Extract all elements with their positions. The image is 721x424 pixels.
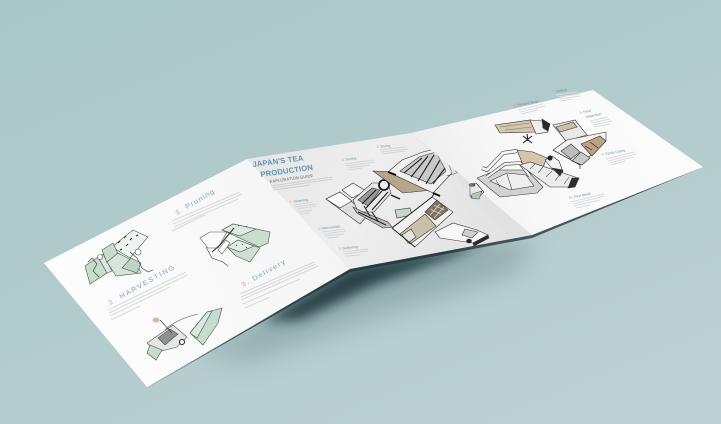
- heading: 3. Delivery: 3. Delivery: [240, 259, 288, 289]
- panel: middle page: [247, 128, 532, 269]
- subtitle: EXPLORATION GUIDE: [269, 173, 314, 184]
- fold shading: [411, 133, 532, 238]
- step labels: Inspection: [585, 112, 602, 119]
- step labels: 9. Finish Drying: [601, 148, 626, 157]
- step labels: 10. First Break: [568, 192, 592, 200]
- step labels: 6. Second Stage: [513, 99, 539, 108]
- title: JAPAN'S TEA: [252, 153, 305, 169]
- illustration: pruning hedges: [200, 224, 270, 266]
- step labels: [513, 88, 636, 208]
- machine: long upper machine: [495, 119, 550, 143]
- panel: right page: [411, 88, 703, 235]
- machine: upper sorting machine: [373, 128, 492, 196]
- step labels: 1. Steaming: [289, 198, 308, 204]
- step labels: 4. Sorting: [341, 156, 357, 162]
- heading: 1. Pruning: 1. Pruning: [174, 188, 217, 217]
- text block: pruning: [172, 192, 242, 231]
- step labels: [289, 144, 408, 256]
- step labels: 3. Delivering: [338, 245, 358, 251]
- illustration: delivery van: [435, 223, 489, 246]
- illustration: harvesting hedges: [85, 230, 153, 284]
- step labels: 2. Intermediate: [317, 224, 341, 231]
- machine: right compartments: [553, 120, 606, 169]
- title: PRODUCTION: [260, 163, 314, 179]
- illustration: worker with tea: [469, 183, 484, 199]
- title: [252, 153, 314, 184]
- text block: delivery: [240, 262, 318, 308]
- heading: 2. Harvesting: 2. HARVESTING: [107, 264, 177, 307]
- panel: left page: [44, 159, 350, 387]
- text block: intro: [271, 177, 333, 190]
- step labels: 8. Final: [579, 109, 592, 115]
- step labels: 5. Drying: [376, 144, 391, 149]
- illustration: tea shop building: [392, 194, 453, 247]
- illustration: delivery car and hedge: [147, 308, 222, 360]
- step labels: 7. Rolling: [552, 88, 567, 94]
- machine: left cylinder machine: [326, 180, 412, 228]
- cast shadow: [147, 167, 703, 388]
- machine: conveyor and pipe: [477, 150, 579, 197]
- text block: harvesting: [108, 272, 187, 320]
